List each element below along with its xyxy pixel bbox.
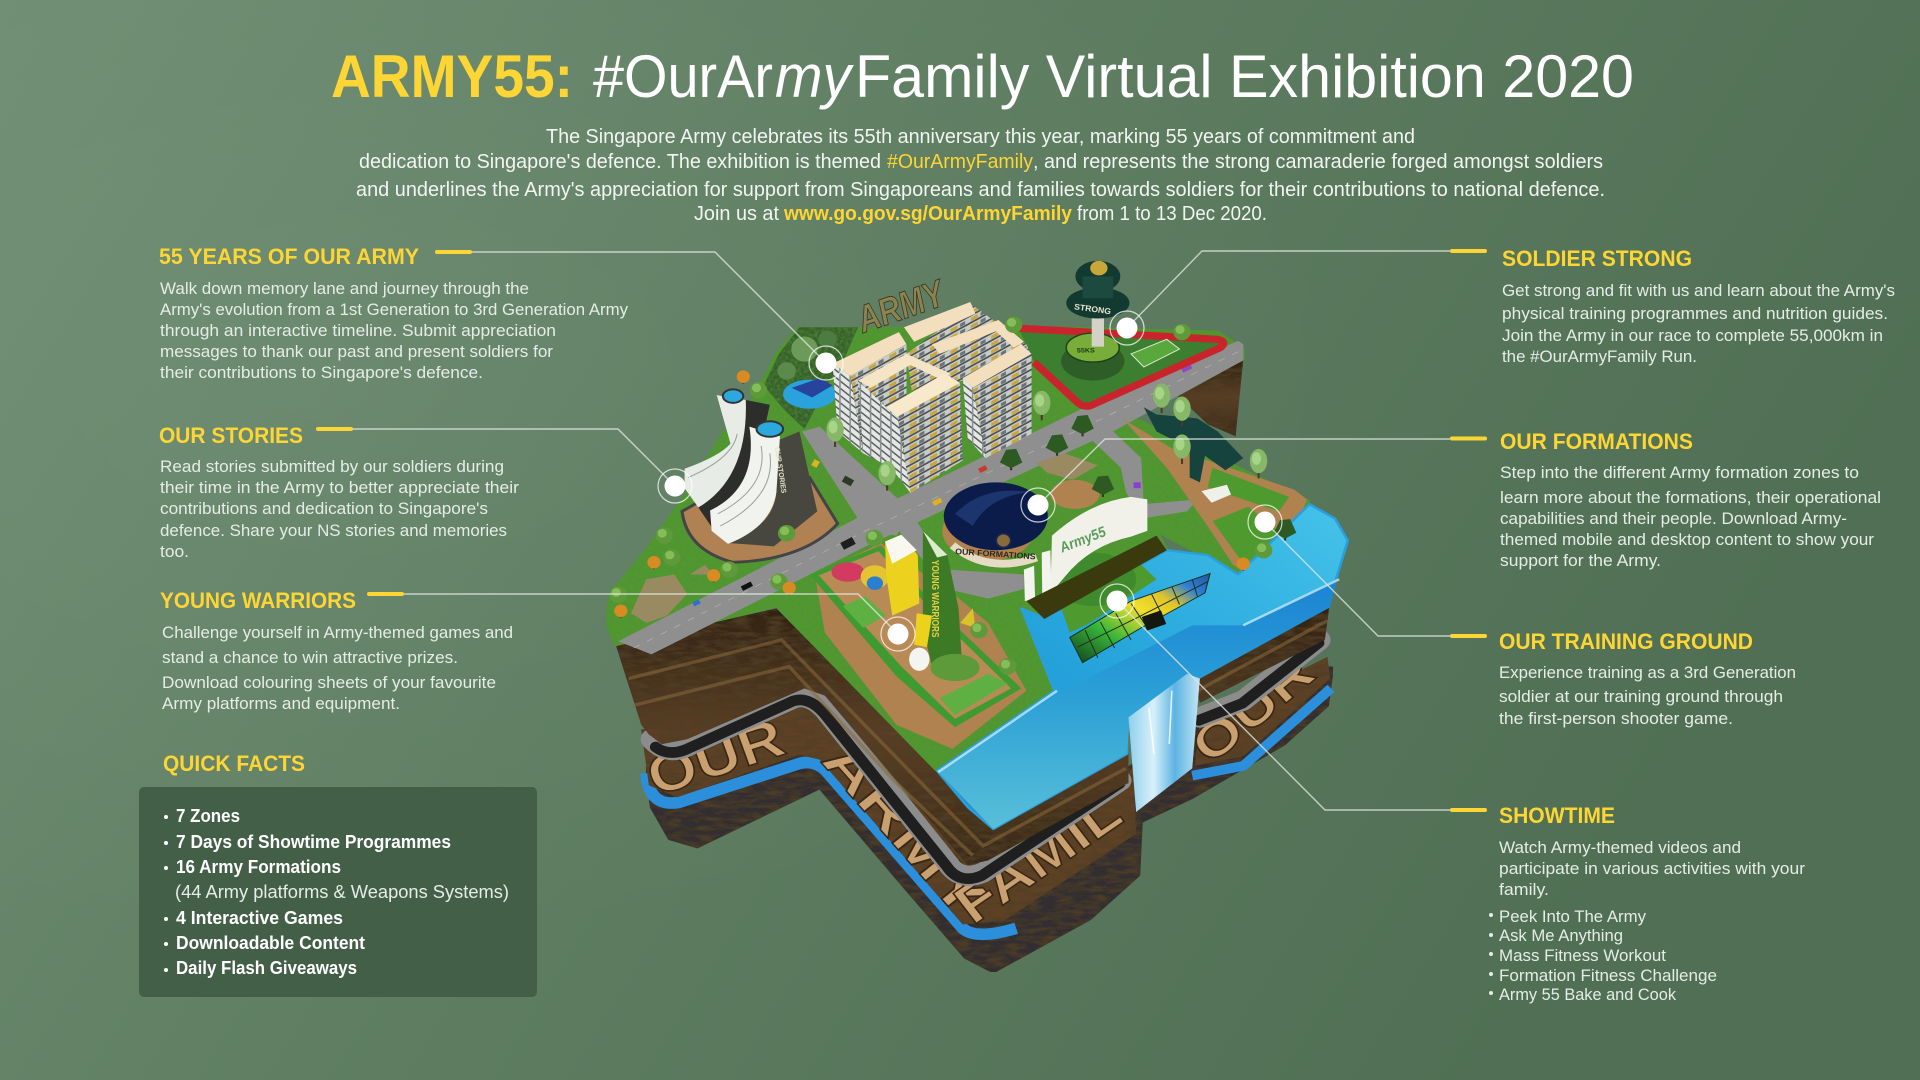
- connector lines: [352, 251, 1450, 810]
- panel: quick facts: 7 Zones: [176, 806, 240, 826]
- waterfall: [1128, 674, 1200, 812]
- young warriors zone: YOUNG WARRIORS: [929, 560, 940, 638]
- panel: showtime: [1452, 803, 1805, 1004]
- panel: showtime: Formation Fitness Challenge: [1499, 966, 1717, 985]
- panel: young warriors: Download colouring sheets of your favourite: [162, 673, 496, 692]
- panel: our formations: [1452, 429, 1881, 570]
- panel: our formations: OUR FORMATIONS: [1500, 429, 1693, 454]
- hotspot markers: [658, 311, 1282, 651]
- panel: our stories: their time in the Army to better appreciate their: [160, 478, 519, 497]
- intro text block: and underlines the Army's appreciation for support from Singaporeans and families towards soldiers for their contributions to national defence.: [356, 179, 1605, 201]
- sports field: [1131, 339, 1179, 367]
- intro text block: , and represents the strong camaraderie forged amongst soldiers: [1033, 151, 1603, 173]
- panel: our formations: support for the Army.: [1500, 551, 1661, 570]
- back-right cliff: [1177, 359, 1243, 436]
- army55 stage: [1024, 497, 1167, 619]
- panel: showtime: Army 55 Bake and Cook: [1499, 985, 1676, 1004]
- rocks: [631, 453, 1098, 623]
- trees: [610, 317, 1296, 675]
- panel: our stories: Read stories submitted by our soldiers during: [160, 457, 504, 476]
- panel: quick facts: 4 Interactive Games: [176, 908, 343, 928]
- panel: our formations: themed mobile and desktop content to show your: [1500, 530, 1874, 549]
- panel: our stories: [159, 423, 519, 561]
- intro text block: #OurArmyFamily: [887, 151, 1033, 173]
- panel: our stories: defence. Share your NS stories and memories: [160, 521, 507, 540]
- title: my: [775, 43, 855, 110]
- training ground lawn: [1208, 468, 1292, 571]
- panel: our training ground: soldier at our training ground through: [1499, 687, 1783, 706]
- water: [937, 504, 1348, 829]
- panel: soldier strong: [1452, 246, 1895, 366]
- tent: [1201, 485, 1231, 503]
- carved letters: OUR: [1180, 644, 1325, 774]
- panel: 55 years of our army: [159, 244, 628, 382]
- intro text block: from 1 to 13 Dec 2020.: [1077, 203, 1267, 225]
- panel: young warriors: [160, 588, 513, 713]
- intro text block: [356, 126, 1605, 225]
- grass surface: [607, 327, 1310, 771]
- forest hill: [764, 327, 858, 429]
- water front face: [937, 579, 1337, 829]
- panel: our training ground: the first-person shooter game.: [1499, 709, 1733, 728]
- soil strata: [628, 620, 1327, 856]
- panel: young warriors: Army platforms and equipment.: [162, 694, 400, 713]
- panel: 55 years of our army: their contributions to Singapore's defence.: [160, 363, 483, 382]
- underground road: [651, 640, 1320, 879]
- panel: soldier strong: Join the Army in our race to complete 55,000km in: [1502, 326, 1883, 345]
- title: #OurAr: [593, 43, 773, 110]
- army55 stage: Army55: [1056, 523, 1109, 557]
- panel: quick facts: 16 Army Formations: [176, 857, 341, 877]
- apartment towers: [833, 302, 1032, 493]
- rifle model: [1144, 407, 1243, 482]
- grid ship: [1070, 573, 1210, 663]
- panel: showtime: participate in various activities with your: [1499, 859, 1805, 878]
- our formations dome: OUR FORMATIONS: [955, 546, 1036, 561]
- panel: quick facts: (44 Army platforms & Weapons Systems): [175, 882, 509, 902]
- panel: young warriors: YOUNG WARRIORS: [160, 588, 356, 613]
- carved letters: OUR: [639, 707, 792, 807]
- panel: our training ground: OUR TRAINING GROUND: [1499, 629, 1753, 654]
- title: [331, 43, 1634, 110]
- island lawn behind ship: [1060, 565, 1157, 633]
- panel: showtime: Ask Me Anything: [1499, 926, 1623, 945]
- panel: showtime: family.: [1499, 880, 1549, 899]
- panel: showtime: Mass Fitness Workout: [1499, 946, 1666, 965]
- our stories building: OUR STORIES: [773, 447, 787, 494]
- soldier strong tower: 55KS: [1077, 348, 1095, 354]
- panel: our stories: too.: [160, 542, 189, 561]
- panel: showtime: Watch Army-themed videos and: [1499, 838, 1741, 857]
- intro text block: Join us at: [694, 203, 779, 225]
- title: Family Virtual Exhibition 2020: [855, 43, 1634, 110]
- training ground terrain: [1123, 419, 1307, 574]
- panel: young warriors: stand a chance to win attractive prizes.: [162, 648, 458, 667]
- panel: young warriors: Challenge yourself in Army-themed games and: [162, 623, 513, 642]
- panel: showtime: Peek Into The Army: [1499, 907, 1646, 926]
- formations yard: [1050, 480, 1099, 509]
- panel: our training ground: Experience training as a 3rd Generation: [1499, 663, 1796, 682]
- panel: soldier strong: SOLDIER STRONG: [1502, 246, 1692, 271]
- stories building grounds: [682, 478, 838, 562]
- surf foam: [938, 579, 1339, 772]
- quick facts heading: QUICK FACTS: [163, 751, 305, 776]
- soldier strong tower: STRONG: [1074, 302, 1112, 316]
- main road network: [618, 341, 1243, 654]
- lagoon with solar panels: [783, 378, 836, 409]
- panel: 55 years of our army: Walk down memory lane and journey through the: [160, 279, 529, 298]
- young warriors zone: [810, 530, 1026, 749]
- panel: quick facts: [139, 787, 537, 997]
- panel: 55 years of our army: messages to thank our past and present soldiers for: [160, 342, 553, 361]
- panel: our training ground: [1452, 629, 1796, 728]
- panel: soldier strong: physical training programmes and nutrition guides.: [1502, 304, 1888, 323]
- title: ARMY55:: [331, 43, 573, 110]
- road markings and tiny cars: [634, 351, 1241, 648]
- panel: soldier strong: the #OurArmyFamily Run.: [1502, 347, 1697, 366]
- our formations dome: [942, 482, 1048, 564]
- panel: 55 years of our army: through an interactive timeline. Submit appreciation: [160, 321, 556, 340]
- upper soil layer: [616, 601, 1330, 865]
- carved letters: FAMIL: [943, 781, 1133, 935]
- soldier strong tower: [1061, 261, 1129, 381]
- panel: 55 years of our army: Army's evolution from a 1st Generation to 3rd Generation Army: [160, 300, 628, 319]
- panel: soldier strong: Get strong and fit with us and learn about the Army's: [1502, 281, 1895, 300]
- panel: our formations: learn more about the formations, their operational: [1500, 488, 1881, 507]
- panel: 55 years of our army: 55 YEARS OF OUR ARMY: [159, 244, 419, 269]
- our stories building: [685, 389, 817, 546]
- panel: quick facts: Daily Flash Giveaways: [176, 958, 357, 978]
- panel: our stories: OUR STORIES: [159, 423, 303, 448]
- panel: quick facts: 7 Days of Showtime Programmes: [176, 832, 451, 852]
- army sign: ARMY: [851, 272, 953, 342]
- intro text block: The Singapore Army celebrates its 55th anniversary this year, marking 55 years of commitment and: [546, 126, 1415, 148]
- panel: our formations: Step into the different Army formation zones to: [1500, 463, 1859, 482]
- panel: quick facts: Downloadable Content: [176, 933, 365, 953]
- soldier strong running track: [1019, 328, 1224, 406]
- panel: our stories: contributions and dedication to Singapore's: [160, 499, 488, 518]
- bottom rock layer: [646, 667, 1333, 972]
- panel: our formations: capabilities and their people. Download Army-: [1500, 509, 1847, 528]
- panel: showtime: SHOWTIME: [1499, 803, 1615, 828]
- 3D island illustration: [607, 261, 1348, 972]
- intro text block: dedication to Singapore's defence. The exhibition is themed: [359, 151, 881, 173]
- underground river: [646, 688, 1331, 934]
- intro text block: www.go.gov.sg/OurArmyFamily: [783, 203, 1073, 225]
- cracked earth band: [641, 657, 1330, 924]
- carved letters: ARMY: [810, 730, 1000, 928]
- carved letters: [639, 644, 1325, 935]
